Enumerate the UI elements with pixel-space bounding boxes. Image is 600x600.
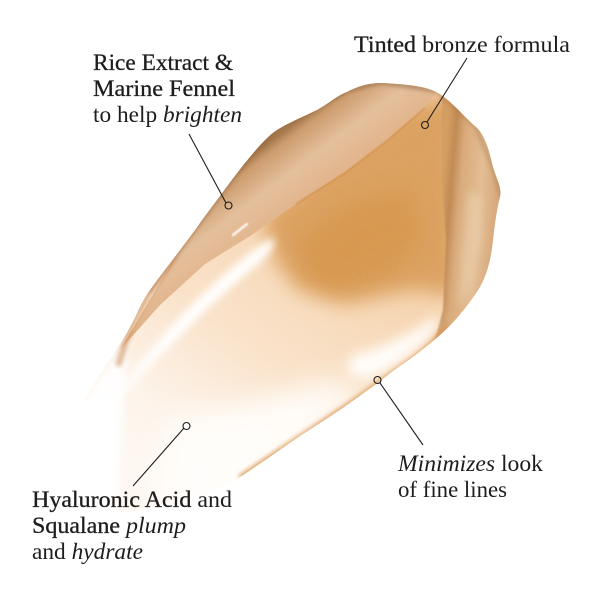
white streak lower right [348, 314, 438, 379]
upper left band [120, 78, 440, 350]
label: Hyaluronic Acid and [32, 487, 233, 512]
callout: rice extract and marine fennel [93, 50, 242, 209]
lower edge fade [100, 485, 250, 540]
band dark top edge [148, 82, 436, 292]
marker [374, 376, 381, 384]
label [397, 451, 544, 502]
white highlight [233, 224, 247, 235]
shimmer grain [171, 92, 497, 320]
bronze deep core [300, 190, 420, 292]
marker [422, 122, 428, 128]
label: Squalane plump [32, 513, 186, 538]
label: and hydrate [32, 539, 143, 564]
white streak left [122, 238, 274, 396]
leader line [427, 58, 467, 122]
leader line [380, 383, 423, 445]
label: of fine lines [398, 477, 507, 502]
cream swatch [84, 83, 500, 512]
swatch base [70, 70, 510, 520]
right band [434, 97, 500, 340]
label: Marine Fennel [93, 76, 235, 101]
marker [225, 202, 232, 209]
right band shine [458, 190, 482, 308]
label: Minimizes look [397, 451, 544, 476]
band ridge line [296, 108, 425, 204]
label [93, 50, 242, 127]
leader line [189, 134, 226, 203]
callout: tinted bronze formula [354, 32, 570, 128]
label [32, 487, 233, 564]
central bronze area [262, 90, 460, 304]
bottom white fade [166, 370, 366, 496]
marker [183, 422, 190, 430]
label: Rice Extract & [93, 50, 233, 75]
lower left edge tint [118, 256, 175, 366]
callout: minimizes look of fine lines [374, 376, 544, 502]
leader line [133, 428, 184, 486]
lower right orange edge [240, 326, 448, 478]
callout: hyaluronic acid and squalane [32, 422, 233, 564]
infographic [32, 35, 570, 564]
right top shadow [436, 90, 501, 197]
spike and left edge pale fade [84, 340, 129, 512]
label: to help brighten [93, 102, 242, 127]
label: Tinted bronze formula [354, 32, 570, 57]
